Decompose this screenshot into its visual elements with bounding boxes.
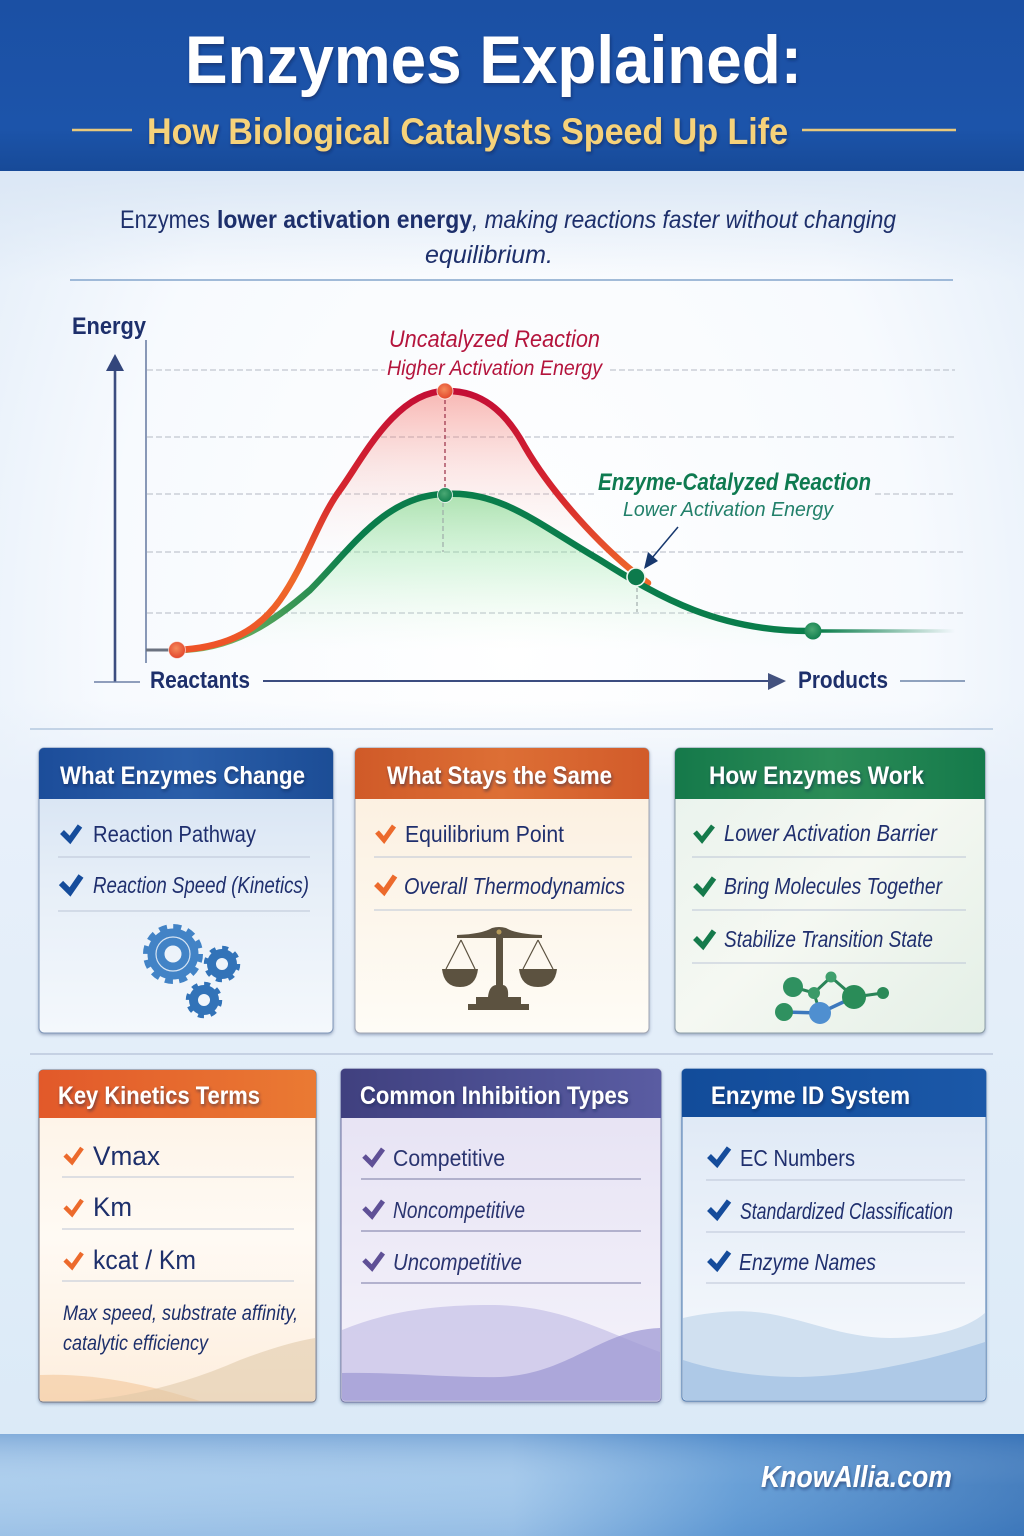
panel: common inhibition types	[341, 1069, 661, 1402]
list item: Equilibrium Point	[405, 821, 565, 847]
title banner	[0, 0, 1024, 171]
catalyzed label: Enzyme-Catalyzed Reaction	[598, 469, 871, 496]
list item: EC Numbers	[740, 1145, 855, 1171]
list item: Uncompetitive	[393, 1249, 522, 1275]
intro text: lower activation energy	[217, 206, 472, 234]
list item: Overall Thermodynamics	[404, 873, 625, 899]
panel: how enzymes work	[675, 748, 985, 1033]
title: Enzymes Explained:	[185, 22, 802, 98]
catalyzed label: Lower Activation Energy	[623, 499, 834, 521]
intro text: equilibrium.	[425, 241, 553, 269]
term: kcat / km: kcat / Km	[93, 1245, 196, 1275]
reactants label: Reactants	[150, 667, 250, 694]
decorative wave	[683, 1311, 985, 1400]
decorative wave	[342, 1305, 660, 1401]
list item: Stabilize Transition State	[724, 926, 933, 952]
panel: key kinetics terms	[39, 1070, 316, 1402]
description text: Max speed, substrate affinity,	[63, 1302, 298, 1325]
term: vmax	[65, 1141, 160, 1171]
term: vmax: Vmax	[93, 1141, 160, 1171]
pointer arrow	[644, 527, 678, 569]
y axis	[94, 340, 146, 682]
green area	[177, 494, 813, 660]
list item: Bring Molecules Together	[724, 873, 943, 899]
decorative wave	[40, 1338, 315, 1401]
description text: catalytic efficiency	[63, 1332, 209, 1355]
heading: Enzyme ID System	[711, 1082, 910, 1110]
heading: Key Kinetics Terms	[58, 1082, 260, 1110]
heading: Common Inhibition Types	[360, 1082, 629, 1110]
y axis label: Energy	[72, 313, 147, 340]
uncatalyzed label	[387, 326, 603, 380]
curve points	[168, 383, 822, 658]
list item: Competitive	[393, 1145, 505, 1171]
brand name: KnowAllia.com	[761, 1459, 952, 1494]
uncatalyzed label: Higher Activation Energy	[387, 357, 603, 380]
panel: what enzymes change	[39, 748, 333, 1033]
description text	[63, 1302, 298, 1355]
intro text: Enzymes	[120, 206, 210, 234]
catalyzed curve, rising side	[177, 494, 445, 650]
catalyzed label	[598, 469, 871, 521]
red area	[177, 391, 648, 650]
heading: What Enzymes Change	[60, 762, 305, 790]
list item: Standardized Classification	[740, 1198, 953, 1224]
panel: enzyme id system	[682, 1069, 986, 1401]
panel: what stays the same	[355, 748, 649, 1033]
list item: Reaction Speed (Kinetics)	[93, 872, 309, 898]
list item: Lower Activation Barrier	[724, 820, 938, 846]
term: km: Km	[93, 1192, 132, 1222]
term: km	[65, 1192, 132, 1222]
heading: What Stays the Same	[387, 762, 612, 790]
list item	[709, 1198, 953, 1224]
icon: gears	[146, 927, 238, 1016]
heading: How Enzymes Work	[709, 762, 924, 790]
intro text	[120, 206, 896, 269]
uncatalyzed curve	[177, 391, 648, 650]
icon: balance scale	[442, 927, 557, 1010]
footer band	[0, 1434, 1024, 1536]
icon: molecule	[775, 972, 889, 1024]
guide lines	[444, 400, 446, 490]
uncatalyzed label: Uncatalyzed Reaction	[389, 326, 600, 353]
catalyzed curve, falling side	[445, 494, 813, 631]
energy diagram chart	[72, 313, 965, 694]
list item: Noncompetitive	[393, 1197, 525, 1223]
products label: Products	[798, 667, 888, 694]
intro text: , making reactions faster without changing	[472, 206, 896, 234]
subtitle: How Biological Catalysts Speed Up Life	[147, 111, 788, 152]
list item: Enzyme Names	[739, 1249, 876, 1275]
x axis	[263, 673, 965, 690]
list item: Reaction Pathway	[93, 821, 256, 847]
